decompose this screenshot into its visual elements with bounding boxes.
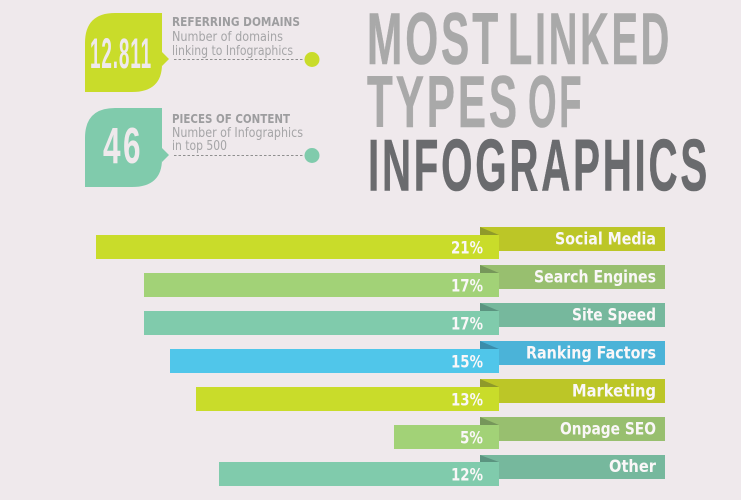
text: pieces of content description: [172, 112, 303, 154]
bar chart: [96, 227, 665, 486]
row: other 12%: [219, 455, 665, 486]
title: TYPES: [367, 62, 520, 143]
row: ranking factors 15%: [170, 341, 665, 373]
title: MOST: [367, 0, 501, 80]
row: marketing 13%: Marketing: [572, 382, 656, 400]
row: onpage seo 5%: [394, 417, 665, 449]
leader line with dot: [174, 148, 320, 163]
row: search engines 17%: Search Engines: [534, 268, 656, 286]
text: referring domains description: linking to Infographics: [172, 44, 293, 59]
row: ranking factors 15%: Ranking Factors: [526, 344, 656, 362]
text: referring domains description: Number of domains: [172, 30, 283, 45]
row: search engines 17%: [144, 265, 665, 297]
row: social media 21%: 21%: [451, 238, 483, 258]
row: marketing 13%: 13%: [451, 390, 483, 410]
text: pieces of content description: in top 500: [172, 139, 227, 154]
text: referring domains description: REFERRING DOMAINS: [172, 15, 300, 29]
badge: 12.811: [85, 13, 169, 92]
title: OF: [528, 62, 584, 143]
text: pieces of content description: PIECES OF CONTENT: [172, 112, 291, 126]
badge: 12.811: 12.811: [90, 30, 152, 78]
callout: pieces of content: [85, 108, 320, 187]
row: site speed 17%: [144, 303, 665, 335]
badge: 46: 46: [103, 117, 143, 174]
row: site speed 17%: Site Speed: [572, 306, 656, 324]
row: social media 21%: [96, 227, 665, 259]
callout: referring domains: [85, 13, 320, 92]
row: social media 21%: Social Media: [555, 230, 656, 248]
title: [367, 0, 710, 206]
row: onpage seo 5%: Onpage SEO: [560, 420, 656, 438]
text: pieces of content description: Number of Infographics: [172, 126, 303, 141]
row: marketing 13%: [196, 379, 665, 411]
leader line with dot: [174, 52, 320, 67]
text: referring domains description: [172, 15, 300, 59]
row: other 12%: 12%: [451, 466, 483, 484]
row: ranking factors 15%: 15%: [451, 352, 483, 372]
row: search engines 17%: 17%: [451, 276, 483, 296]
badge: 46: [85, 108, 169, 187]
row: other 12%: Other: [609, 457, 657, 476]
row: site speed 17%: 17%: [451, 314, 483, 334]
row: onpage seo 5%: 5%: [460, 428, 483, 448]
